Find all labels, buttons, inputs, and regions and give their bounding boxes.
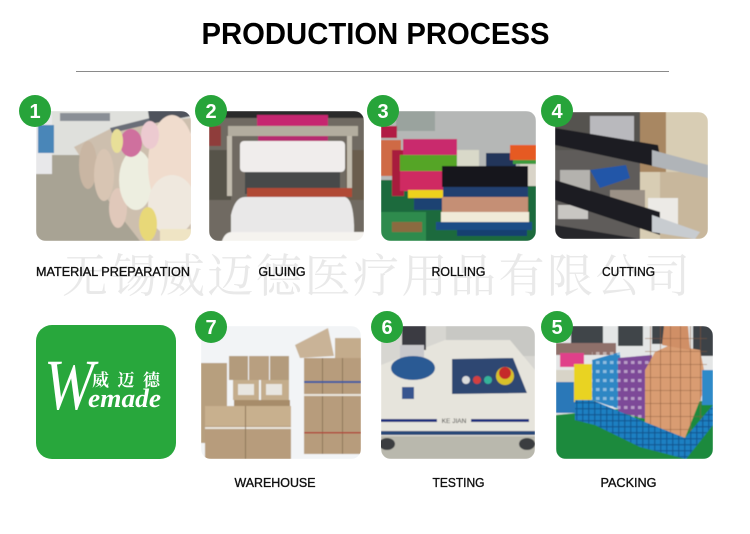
badge 4: [541, 95, 573, 127]
photo 5: packing: [556, 326, 713, 459]
badge 3: 3: [377, 101, 389, 123]
badge 6: 6: [381, 317, 393, 339]
badge 2: 2: [205, 101, 217, 123]
badge 5: 5: [551, 317, 563, 339]
photo 4: cutting: [555, 112, 708, 239]
photo 3: rolling: [381, 111, 536, 241]
photo 7: warehouse: [201, 326, 361, 459]
label: packing: PACKING: [600, 476, 656, 490]
label: cutting: CUTTING: [602, 265, 655, 279]
badge 4: 4: [551, 101, 563, 123]
logo wordmark: emade: [88, 384, 161, 413]
photo 2: gluing: [209, 111, 364, 241]
badge 6: [371, 311, 403, 343]
photo 6: testing: KE JIAN: [442, 418, 467, 425]
label: warehouse: WAREHOUSE: [234, 476, 316, 490]
label: rolling: ROLLING: [432, 265, 486, 279]
watermark: 无锡威迈德医疗用品有限公司: [62, 240, 690, 306]
badge 1: [19, 95, 51, 127]
badge 7: [195, 311, 227, 343]
badge 5: [541, 311, 573, 343]
badge 7: 7: [205, 317, 217, 339]
badge 2: [195, 95, 227, 127]
badge 1: 1: [29, 101, 41, 123]
title: PRODUCTION PROCESS: [202, 16, 550, 51]
photo 1: material preparation: [36, 111, 196, 241]
green logo panel: [36, 325, 176, 459]
label: gluing: GLUING: [258, 265, 306, 279]
logo letter W: W: [44, 345, 99, 425]
photo 6: testing: [379, 326, 535, 459]
badge 3: [367, 95, 399, 127]
logo chinese name: 威迈德: [92, 366, 162, 391]
label: material preparation: MATERIAL PREPARATION: [36, 265, 190, 279]
label: testing: TESTING: [432, 476, 484, 490]
